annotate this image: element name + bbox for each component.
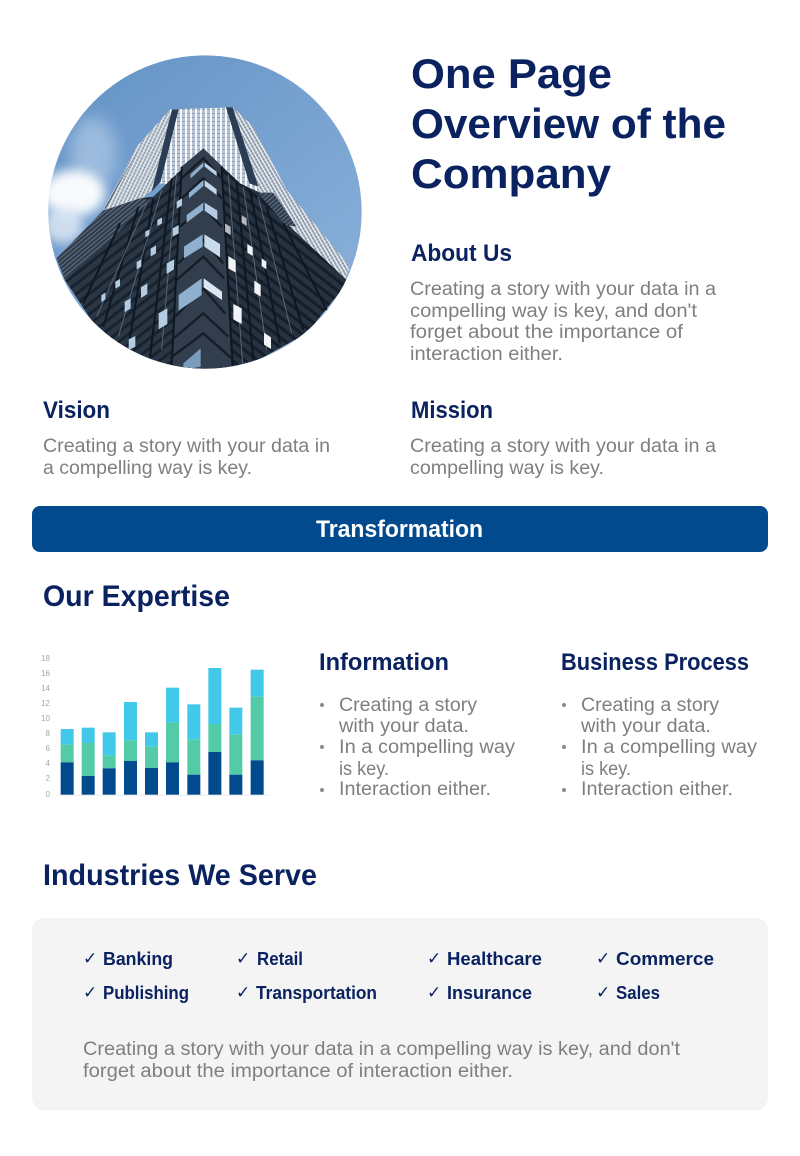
text block: business process: with your data. (580, 716, 711, 737)
chart axis labels: 6 (46, 744, 51, 753)
chart axis labels: 2 (46, 774, 51, 783)
industry checklist (83, 948, 714, 1003)
panel: industries (32, 918, 768, 1110)
chart axis labels: 16 (41, 669, 51, 678)
industry checklist: Sales (616, 982, 660, 1003)
industry checklist: ✓ (427, 949, 441, 969)
industry checklist: ✓ (236, 949, 250, 969)
industry checklist: ✓ (596, 949, 610, 969)
industry checklist: Healthcare (447, 948, 542, 969)
side windows (225, 215, 271, 349)
text block: information: Creating a story (339, 695, 478, 716)
title (411, 50, 726, 197)
title: One Page (411, 50, 612, 97)
text block: business process: In a compelling way (581, 737, 758, 758)
chart axis labels: 14 (41, 684, 51, 693)
dark facade (57, 148, 203, 375)
text block: information: In a compelling way (339, 737, 516, 758)
title: Company (411, 150, 612, 197)
text block: mission (410, 397, 716, 479)
heading: our expertise: Our Expertise (43, 580, 230, 613)
text block: about us: Creating a story with your data in a (410, 279, 716, 300)
text block: mission: compelling way is key. (410, 458, 604, 479)
text block: business process: Interaction either. (581, 779, 733, 800)
chart axis labels: 8 (46, 729, 51, 738)
photo: skyscraper in circle (40, 50, 370, 375)
chart axis labels: 12 (41, 699, 51, 708)
text block: mission: Creating a story with your data in a (410, 436, 716, 457)
title: Overview of the (411, 100, 726, 147)
industry checklist: ✓ (83, 983, 97, 1003)
text block: business process: is key. (581, 759, 631, 780)
industry checklist: Insurance (447, 982, 532, 1003)
text block: information: Information (319, 649, 449, 676)
text block: about us: compelling way is key, and don't (410, 301, 698, 322)
text block: vision: a compelling way is key. (43, 458, 252, 479)
industry checklist: ✓ (83, 949, 97, 969)
bar chart: stacked bars (41, 654, 270, 799)
text block: business process: Creating a story (581, 695, 720, 716)
text block: vision: Creating a story with your data in (43, 436, 330, 457)
banner: transformation: Transformation (316, 516, 483, 543)
panel description: Creating a story with your data in a compelling way is key, and don't (83, 1039, 681, 1060)
text block: vision: Vision (43, 397, 110, 424)
chart axis labels: 0 (46, 790, 51, 799)
text block: business process: Business Process (561, 649, 749, 676)
chart axis labels: 18 (41, 654, 51, 663)
industry checklist: Publishing (103, 982, 189, 1003)
industry checklist: Transportation (256, 982, 377, 1003)
industry checklist: ✓ (427, 983, 441, 1003)
industry checklist: ✓ (236, 983, 250, 1003)
text block: information: with your data. (338, 716, 469, 737)
text block: mission: Mission (411, 397, 493, 424)
text block: information: Interaction either. (339, 779, 491, 800)
industry checklist: Banking (103, 948, 173, 969)
panel description (83, 1039, 681, 1082)
banner: transformation (32, 506, 768, 552)
text block: business process (561, 649, 758, 800)
industry checklist: Commerce (616, 948, 714, 969)
chart axis labels: 4 (46, 759, 51, 768)
chart bars (57, 668, 270, 796)
text block: information (319, 649, 516, 800)
panel description: forget about the importance of interaction either. (83, 1061, 513, 1082)
industry checklist: ✓ (596, 983, 610, 1003)
heading: industries we serve: Industries We Serve (43, 859, 317, 892)
text block: about us: About Us (411, 240, 512, 267)
chart axis labels (41, 654, 51, 799)
chart axis labels: 10 (41, 714, 51, 723)
text block: about us (410, 240, 716, 365)
text block: about us: forget about the importance of (410, 322, 684, 343)
text block: about us: interaction either. (410, 344, 563, 365)
industry checklist: Retail (257, 948, 303, 969)
text block: information: is key. (339, 759, 389, 780)
text block: vision (43, 397, 330, 479)
chevron floors (170, 158, 232, 358)
